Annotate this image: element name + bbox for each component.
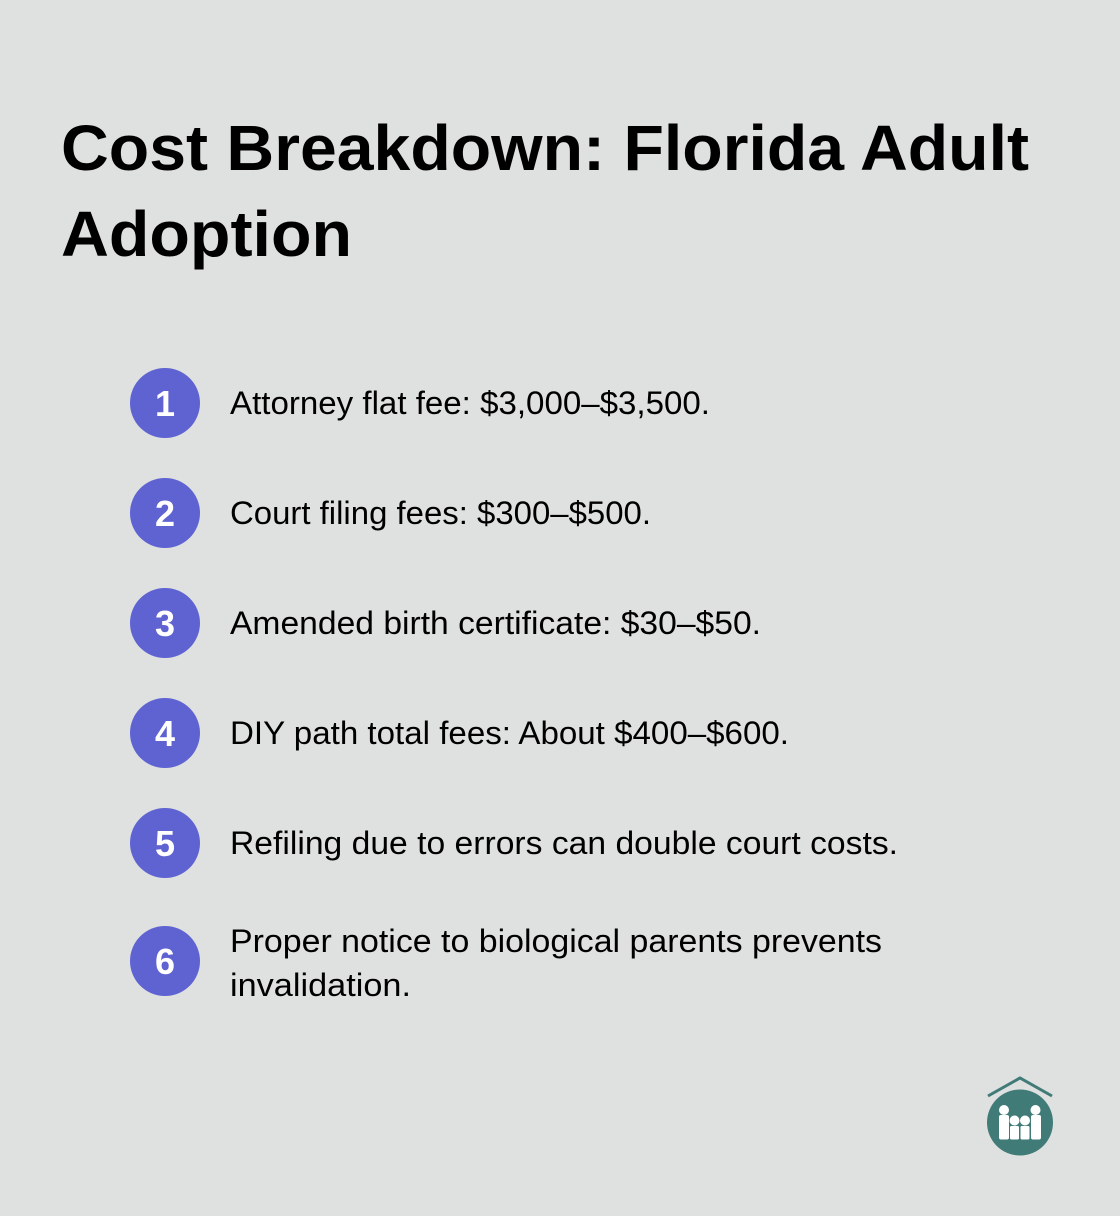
item 2: 2 bbox=[155, 493, 175, 534]
item 1 bbox=[130, 368, 710, 438]
title: Cost Breakdown: Florida Adult bbox=[61, 112, 1029, 184]
item 1: Attorney flat fee: $3,000–$3,500. bbox=[230, 385, 710, 421]
item 3 bbox=[130, 588, 761, 658]
item 5: Refiling due to errors can double court costs. bbox=[230, 825, 898, 861]
title: Adoption bbox=[61, 198, 352, 270]
item 2: Court filing fees: $300–$500. bbox=[230, 495, 651, 531]
item 6: Proper notice to biological parents prevents bbox=[230, 923, 882, 959]
item 3: 3 bbox=[155, 603, 175, 644]
item 5 bbox=[130, 808, 898, 878]
item 4: 4 bbox=[155, 713, 175, 754]
item 6 bbox=[130, 923, 882, 1003]
item 2 bbox=[130, 478, 651, 548]
item 4 bbox=[130, 698, 789, 768]
item 1: 1 bbox=[155, 383, 175, 424]
item 6: invalidation. bbox=[230, 967, 411, 1003]
item 3: Amended birth certificate: $30–$50. bbox=[230, 605, 761, 641]
item 6: 6 bbox=[155, 941, 175, 982]
item 5: 5 bbox=[155, 823, 175, 864]
item 4: DIY path total fees: About $400–$600. bbox=[230, 715, 789, 751]
icon: family house logo bbox=[987, 1078, 1053, 1156]
title bbox=[61, 112, 1029, 270]
list of cost items bbox=[130, 368, 898, 1003]
